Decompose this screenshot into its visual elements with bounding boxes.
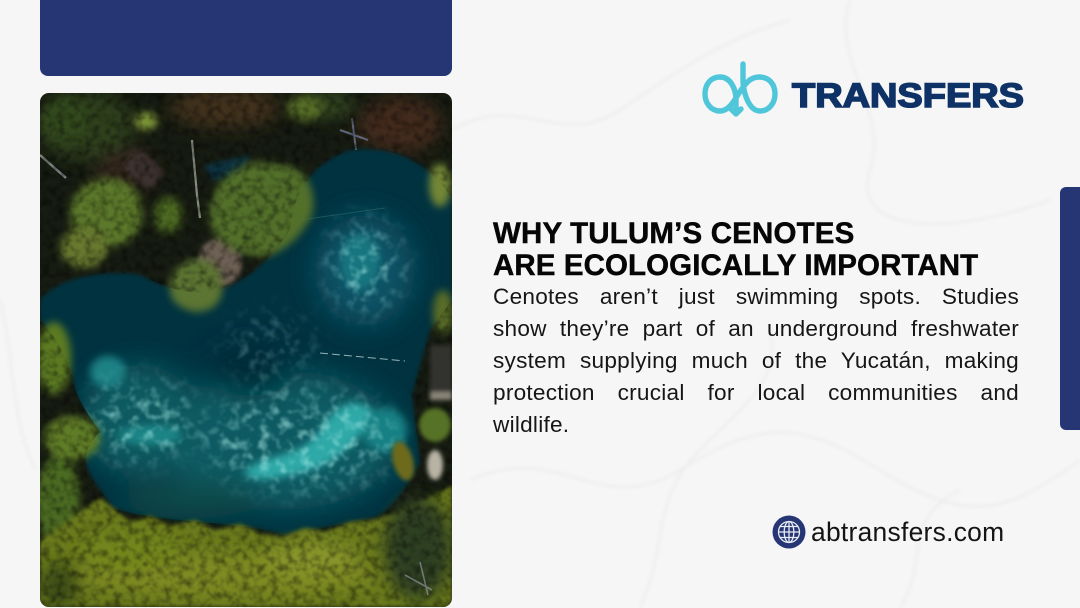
body text: show they’re part of an underground freshwater — [493, 316, 1019, 341]
website contact — [772, 516, 1004, 548]
photo: aerial view of a cenote — [40, 93, 452, 607]
dark forest base — [40, 93, 452, 607]
logo icon: ab infinity mark — [702, 61, 778, 117]
heading: WHY TULUM’S CENOTES — [493, 217, 854, 250]
mangrove branches — [40, 155, 66, 178]
logo wordmark: TRANSFERS — [792, 77, 1024, 115]
heading: ARE ECOLOGICALLY IMPORTANT — [493, 249, 978, 282]
right edge navy tab — [1060, 187, 1080, 430]
body text — [493, 284, 1019, 437]
body text: Cenotes aren’t just swimming spots. Studies — [493, 284, 1019, 309]
heading — [492, 217, 978, 282]
body text: system supplying much of the Yucatán, making — [493, 348, 1019, 373]
body text: protection crucial for local communities and — [493, 380, 1019, 405]
top navy panel — [40, 0, 452, 76]
icon: globe — [772, 516, 806, 548]
logo — [702, 61, 1024, 117]
left bank foliage — [36, 322, 100, 544]
water body — [40, 149, 452, 535]
website url: abtransfers.com — [811, 517, 1004, 547]
bottom grass bank — [40, 486, 452, 607]
central trees and islet — [122, 146, 250, 286]
thin rope lines — [320, 353, 405, 361]
right bank: rocks and trees — [388, 345, 452, 483]
body text: wildlife. — [493, 412, 569, 437]
